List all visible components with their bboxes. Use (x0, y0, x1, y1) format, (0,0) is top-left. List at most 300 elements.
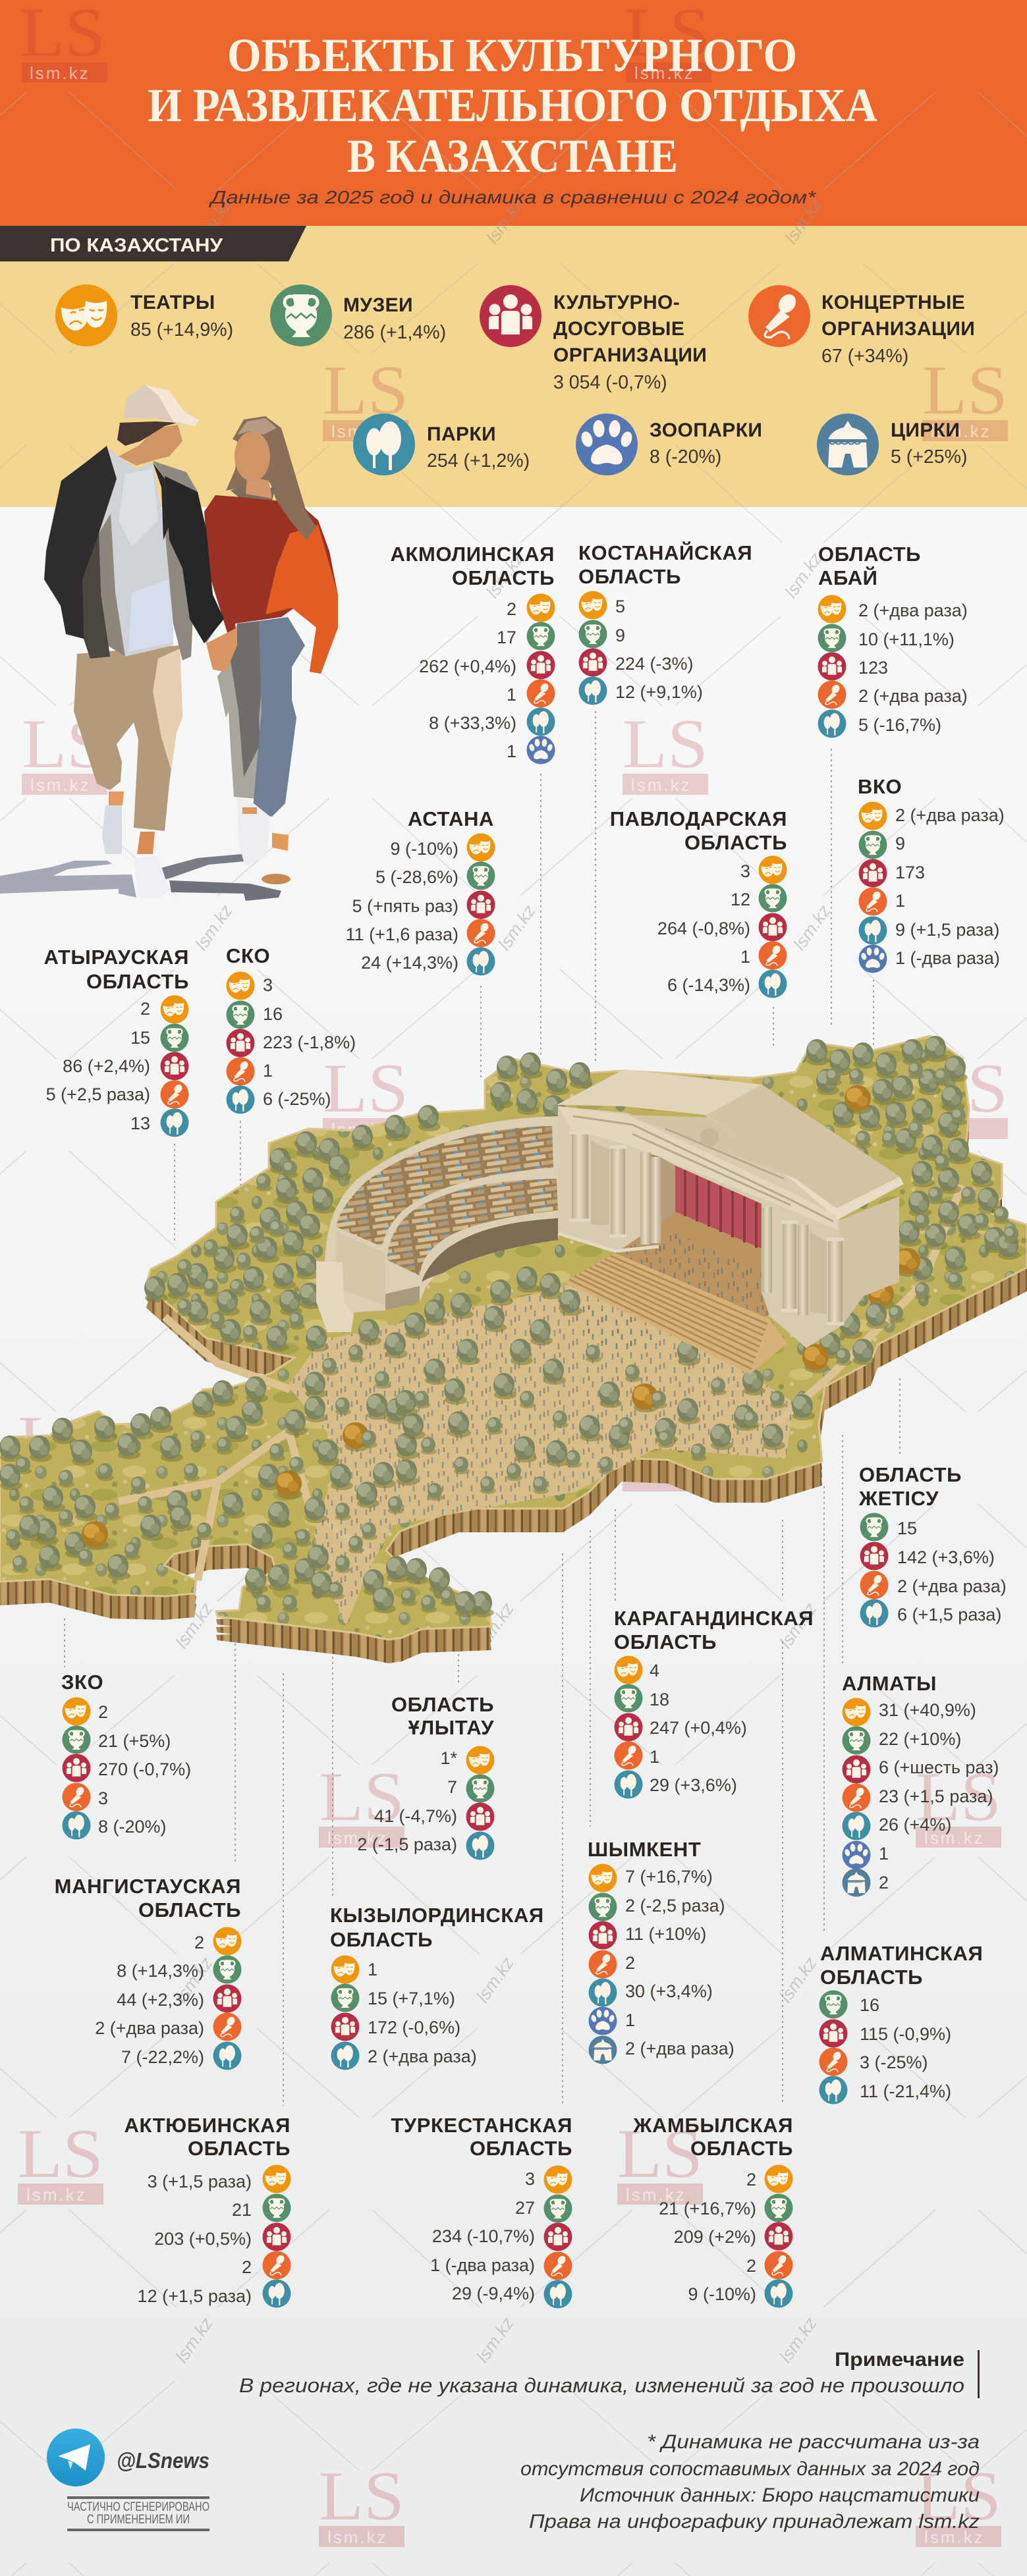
heading: ОБЛАСТЬ (138, 1898, 241, 1921)
watermark logos: LS (916, 2457, 1001, 2535)
small rotated watermarks (171, 194, 835, 2366)
stats: 8 (+14,3%) (117, 1961, 204, 1981)
stats: 26 (+4%) (879, 1815, 951, 1835)
heading: ЖЕТІСУ (858, 1487, 939, 1510)
stats (843, 1698, 999, 1896)
stats: 8 (-20%) (98, 1817, 167, 1837)
AI disclaimer: С ПРИМЕНЕНИЕМ ИИ (87, 2513, 190, 2527)
heading (330, 1904, 544, 1951)
stats: 2 (98, 1702, 108, 1722)
stats: 247 (+0,4%) (650, 1718, 747, 1738)
stats: 6 (-14,3%) (667, 975, 750, 995)
region: ВКО (858, 775, 1005, 973)
stats: 5 (615, 597, 625, 616)
stats: 9 (-10%) (688, 2284, 756, 2304)
small rotated watermarks: lsm.kz (171, 2313, 217, 2366)
stats: 1 (-два раза) (895, 948, 1000, 968)
stats: 2 (-1,5 раза) (357, 1835, 457, 1854)
stats: 173 (895, 863, 925, 882)
stats (346, 834, 495, 975)
roof (557, 1069, 900, 1212)
stats: 2 (879, 1873, 889, 1892)
stats: 41 (-4,7%) (374, 1806, 457, 1826)
stat: concert organisations (748, 285, 975, 367)
watermark logos: lsm.kz (626, 2185, 686, 2205)
heading: АЛМАТИНСКАЯ (820, 1942, 983, 1965)
woman (204, 416, 338, 884)
stats: 1 (507, 685, 516, 705)
stats: 1 (507, 741, 516, 761)
heading (391, 1693, 494, 1739)
heading (578, 541, 752, 588)
steps (564, 1253, 787, 1374)
stats (657, 856, 787, 998)
header band (0, 0, 1027, 226)
stats: 16 (860, 1995, 879, 2015)
stats: 44 (+2,3%) (117, 1990, 204, 2010)
small rotated watermarks: lsm.kz (472, 1599, 518, 1651)
stat: museums: МУЗЕИ (343, 294, 413, 316)
heading (818, 543, 921, 589)
heading: АКМОЛИНСКАЯ (391, 543, 555, 566)
watermark logos: lsm.kz (924, 2527, 985, 2547)
footnotes and source: отсутствия сопоставимых данных за 2024 год (520, 2458, 980, 2480)
region: Область Ұлытау (357, 1693, 494, 1860)
heading: ШЫМКЕНТ (588, 1838, 701, 1861)
watermark logos: lsm.kz (30, 775, 91, 795)
AI disclaimer: ЧАСТИЧНО СГЕНЕРИРОВАНО (67, 2500, 209, 2514)
stats: 2 (-2,5 раза) (625, 1896, 725, 1916)
stats: 2 (+два раза) (858, 686, 968, 706)
stat: cultural organisations: ОРГАНИЗАЦИИ (553, 344, 707, 366)
heading (610, 807, 787, 854)
watermark logos: LS (319, 1758, 404, 1835)
stats: 13 (130, 1114, 150, 1133)
stats (419, 594, 555, 764)
stat: parks: ПАРКИ (427, 423, 496, 445)
stats: 123 (858, 658, 888, 678)
stats (138, 2165, 291, 2307)
heading: ОБЛАСТЬ (452, 566, 555, 589)
section tab: По Казахстану: ПО КАЗАХСТАНУ (50, 235, 223, 256)
stats: 2 (746, 2256, 756, 2276)
stat: concert organisations: КОНЦЕРТНЫЕ (821, 292, 965, 313)
stat: circuses (817, 414, 967, 475)
small rotated watermarks: lsm.kz (482, 194, 528, 247)
heading: ОБЛАСТЬ (86, 970, 189, 993)
stats (859, 802, 1005, 973)
footnotes and source: Права на инфографику принадлежат lsm.kz (529, 2511, 980, 2533)
stat: circuses: ЦИРКИ (891, 419, 960, 441)
stats: 1 (740, 947, 750, 967)
stats: 5 (+2,5 раза) (46, 1085, 150, 1104)
subtitle: Данные за 2025 год и динамика в сравнении с 2024 годом* (208, 187, 816, 207)
title (148, 29, 877, 182)
small rotated watermarks: lsm.kz (472, 2313, 518, 2366)
heading: ЗКО (61, 1671, 103, 1694)
watermark logos: LS (916, 1758, 1001, 1835)
stat: parks (353, 414, 530, 475)
note block: Примечание (835, 2349, 964, 2371)
stats: 11 (+10%) (625, 1924, 706, 1944)
region: ЗКО (61, 1671, 191, 1839)
stats: 16 (263, 1004, 283, 1024)
stats: 18 (650, 1690, 669, 1709)
stats: 1* (440, 1748, 457, 1768)
small rotated watermarks: lsm.kz (775, 2313, 821, 2366)
stats: 3 (263, 975, 273, 995)
stats: 4 (650, 1661, 659, 1680)
stats: 209 (+2%) (674, 2227, 756, 2247)
stats: 203 (+0,5%) (154, 2229, 252, 2249)
heading: ЖАМБЫЛСКАЯ (632, 2114, 793, 2137)
stats: 1 (650, 1747, 659, 1767)
stats: 22 (+10%) (879, 1729, 961, 1749)
watermark logos: lsm.kz (331, 421, 392, 441)
shadows (0, 854, 281, 901)
panel: national stats (55, 284, 975, 475)
region: Костанайская область (578, 541, 752, 705)
small rotated watermarks: lsm.kz (789, 901, 835, 953)
stats: 115 (-0,9%) (860, 2024, 951, 2044)
stats: 223 (-1,8%) (263, 1033, 356, 1052)
stats: 1 (895, 891, 905, 911)
stats (95, 1927, 241, 2070)
heading (614, 1607, 814, 1653)
small rotated watermarks: lsm.kz (775, 1599, 821, 1651)
stat: zoos: 8 (-20%) (650, 446, 721, 468)
stat: theatres (55, 284, 233, 346)
heading: ОБЛАСТЬ (684, 831, 787, 854)
region: Мангистауская область (55, 1875, 241, 2070)
footnotes and source: Источник данных: Бюро нацстатистики (580, 2484, 980, 2506)
heading: КАРАГАНДИНСКАЯ (614, 1607, 814, 1630)
watermark logos: lsm.kz (931, 421, 991, 441)
heading: ОБЛАСТЬ (859, 1463, 962, 1486)
stage (615, 1212, 769, 1320)
stat: concert organisations: ОРГАНИЗАЦИИ (821, 318, 975, 340)
stat: museums: 286 (+1,4%) (343, 322, 446, 343)
watermark logos: LS (623, 1402, 708, 1479)
note block (239, 2349, 980, 2398)
map surface (0, 1036, 1027, 1640)
watermark logos: LS (323, 1050, 408, 1127)
stats: 7 (-22,2%) (121, 2047, 204, 2067)
stats (227, 972, 356, 1114)
heading (632, 2114, 793, 2160)
stat: zoos: ЗООПАРКИ (650, 419, 762, 441)
watermark logos: lsm.kz (924, 1828, 985, 1848)
stats: 3 (98, 1788, 108, 1808)
heading (391, 543, 555, 589)
small rotated watermarks: lsm.kz (482, 549, 528, 601)
small rotated watermarks: lsm.kz (191, 901, 236, 953)
stats: 8 (+33,3%) (429, 713, 516, 733)
watermark logos: lsm.kz (327, 1828, 388, 1848)
watermark logos: LS (617, 2115, 703, 2192)
icon: telegram (47, 2428, 105, 2486)
watermark logos: LS (319, 2457, 404, 2535)
footnotes and source (520, 2431, 980, 2533)
stats: 7 (+16,7%) (625, 1867, 713, 1887)
stats: 224 (-3%) (615, 654, 694, 674)
stats: 3 (-25%) (860, 2053, 928, 2072)
illustration: couple walking (0, 385, 338, 901)
stat: parks: 254 (+1,2%) (427, 450, 530, 471)
stats (430, 2166, 572, 2308)
small rotated watermarks: lsm.kz (775, 1953, 821, 2006)
stats: 10 (+11,1%) (858, 630, 955, 649)
stats: 21 (+16,7%) (659, 2199, 756, 2218)
stats: 3 (525, 2169, 535, 2189)
region: Алматинская область (819, 1942, 983, 2104)
heading: ОБЛАСТЬ (818, 543, 921, 566)
watermark logos: LS (623, 705, 708, 782)
dotted leader lines (65, 711, 900, 2106)
stats: 262 (+0,4%) (419, 657, 516, 676)
heading: ТУРКЕСТАНСКАЯ (391, 2114, 572, 2137)
region: Кызылординская область (330, 1904, 544, 2070)
small rotated watermarks: lsm.kz (472, 1953, 518, 2006)
watermark logos: lsm.kz (30, 63, 90, 83)
watermark logos: LS (922, 1050, 1008, 1127)
region: Карагандинская область (614, 1607, 814, 1798)
stats (46, 996, 188, 1137)
stage curtain (675, 1166, 762, 1248)
stats: 15 (+7,1%) (368, 1989, 455, 2008)
stats: 29 (-9,4%) (452, 2284, 535, 2303)
pediment (627, 1115, 801, 1181)
heading: ОБЛАСТЬ (188, 2137, 291, 2160)
stats: 5 (-16,7%) (858, 715, 941, 735)
stats: 2 (+два раза) (625, 2039, 735, 2058)
stats: 9 (+1,5 раза) (895, 920, 999, 940)
title: ОБЪЕКТЫ КУЛЬТУРНОГО (227, 29, 797, 82)
stats: 21 (232, 2200, 252, 2220)
stat: zoos (576, 414, 762, 475)
stat: theatres: ТЕАТРЫ (130, 292, 215, 313)
trees (0, 1036, 1020, 1617)
heading (55, 1875, 241, 1921)
stats: 15 (897, 1518, 917, 1538)
stats: 17 (497, 628, 516, 647)
watermark logos: LS (922, 352, 1008, 429)
stats: 86 (+2,4%) (63, 1056, 150, 1076)
region: СКО (226, 944, 356, 1114)
stats: 5 (-28,6%) (375, 867, 458, 887)
stat: cultural organisations: 3 054 (-0,7%) (553, 372, 667, 393)
heading: ОБЛАСТЬ (578, 565, 681, 588)
stats: 5 (+пять раз) (352, 896, 458, 916)
stats: 142 (+3,6%) (897, 1547, 995, 1567)
stats: 29 (+3,6%) (650, 1775, 737, 1795)
stats: 3 (740, 861, 750, 881)
watermark logos: lsm.kz (631, 775, 692, 795)
region: Актюбинская область (124, 2114, 291, 2307)
stats: 12 (731, 890, 750, 909)
stats: 11 (+1,6 раза) (346, 925, 458, 944)
man (44, 385, 237, 899)
heading: ОБЛАСТЬ (614, 1630, 717, 1653)
watermark logos: lsm.kz (331, 1119, 392, 1139)
watermark logos: LS (323, 352, 408, 429)
watermark logos: lsm.kz (634, 63, 695, 83)
stats: 172 (-0,6%) (368, 2018, 460, 2037)
national summary band (0, 226, 1027, 507)
heading: СКО (226, 944, 270, 967)
stats (860, 1513, 1007, 1627)
stats: 3 (+1,5 раза) (148, 2172, 252, 2191)
stats: 1 (625, 2010, 635, 2030)
heading: ВКО (858, 775, 902, 798)
small rotated watermarks: lsm.kz (494, 901, 540, 953)
stats (357, 1746, 494, 1860)
heading: МАНГИСТАУСКАЯ (55, 1875, 241, 1898)
stats: 1 (879, 1844, 889, 1864)
stats: 2 (140, 999, 150, 1019)
stat: cultural organisations (480, 285, 707, 393)
stats (331, 1956, 477, 2070)
heading (391, 2114, 572, 2160)
stats: 27 (515, 2198, 535, 2218)
small rotated watermarks: lsm.kz (171, 1953, 217, 2006)
stats: 11 (-21,4%) (860, 2081, 951, 2101)
stats: 30 (+3,4%) (625, 1981, 713, 2001)
note block: В регионах, где не указана динамика, изменений за год не произошло (239, 2374, 964, 2397)
stats: 2 (+два раза) (895, 805, 1005, 825)
stats (579, 591, 703, 705)
heading: АТЫРАУСКАЯ (43, 946, 189, 969)
stats (615, 1656, 747, 1798)
stats: 6 (+шесть раз) (879, 1758, 999, 1777)
region: Алматы (842, 1672, 999, 1896)
stats (659, 2165, 792, 2307)
stats: 6 (-25%) (263, 1089, 331, 1109)
region: Астана (346, 807, 495, 975)
stats: 9 (-10%) (390, 839, 458, 859)
heading: ОБЛАСТЬ (470, 2137, 572, 2160)
stats (63, 1698, 191, 1839)
heading (124, 2114, 291, 2160)
stats: 23 (+1,5 раза) (879, 1786, 993, 1806)
small rotated watermarks: lsm.kz (191, 194, 236, 247)
heading: ПАВЛОДАРСКАЯ (610, 807, 787, 830)
stats: 9 (615, 626, 625, 645)
heading: АБАЙ (818, 566, 878, 589)
stats: 2 (+два раза) (897, 1576, 1007, 1596)
stats: 9 (895, 834, 905, 853)
watermark logos: lsm.kz (327, 2527, 388, 2547)
stats: 15 (130, 1028, 150, 1048)
heading (858, 1463, 962, 1510)
stat: circuses: 5 (+25%) (891, 446, 967, 468)
small rotated watermarks: lsm.kz (171, 1599, 217, 1651)
region: Туркестанская область (391, 2114, 572, 2308)
stats: 12 (+1,5 раза) (138, 2286, 252, 2306)
heading: КЫЗЫЛОРДИНСКАЯ (330, 1904, 544, 1927)
heading: ОБЛАСТЬ (690, 2137, 793, 2160)
heading: АЛМАТЫ (842, 1672, 937, 1695)
amphitheatre (316, 1116, 559, 1332)
region: Область Жетісу (858, 1463, 1007, 1627)
stats: 21 (+5%) (98, 1731, 171, 1751)
stat: cultural organisations: КУЛЬТУРНО- (553, 292, 680, 313)
title: И РАЗВЛЕКАТЕЛЬНОГО ОТДЫХА (148, 79, 877, 132)
watermark logos: lsm.kz (26, 2185, 87, 2205)
map cliff edge (0, 1044, 1027, 1663)
stats (818, 595, 968, 738)
stats: 7 (447, 1777, 457, 1797)
telegram badge: @LSnews (117, 2448, 209, 2473)
watermark logos: LS (18, 1402, 103, 1479)
stats: 24 (+14,3%) (361, 953, 458, 973)
telegram badge (47, 2428, 209, 2486)
region: Акмолинская область (391, 543, 555, 764)
AI disclaimer (67, 2496, 209, 2531)
heading: ҰЛЫТАУ (408, 1716, 494, 1739)
stats: 2 (507, 599, 516, 619)
region: Атырауская область (43, 946, 189, 1137)
stats (589, 1864, 735, 2064)
stats: 1 (368, 1960, 377, 1979)
stats (819, 1991, 951, 2104)
stats: 270 (-0,7%) (98, 1759, 191, 1779)
stats: 6 (+1,5 раза) (897, 1605, 1001, 1624)
section tab: По Казахстану (0, 226, 306, 261)
sand plaza (119, 1185, 962, 1626)
stats: 2 (+два раза) (368, 2047, 477, 2066)
stats: 234 (-10,7%) (432, 2226, 535, 2246)
stat: concert organisations: 67 (+34%) (821, 346, 908, 367)
stat: theatres: 85 (+14,9%) (130, 319, 233, 340)
theatre building (557, 1069, 904, 1374)
heading: АКТЮБИНСКАЯ (124, 2114, 291, 2137)
region: Жамбылская область (632, 2114, 793, 2307)
heading: КОСТАНАЙСКАЯ (578, 541, 752, 564)
watermark logos: LS (22, 705, 107, 782)
stats: 31 (+40,9%) (879, 1700, 976, 1720)
stat: cultural organisations: ДОСУГОВЫЕ (553, 318, 684, 340)
small rotated watermarks: lsm.kz (781, 194, 826, 247)
heading: ОБЛАСТЬ (391, 1693, 494, 1716)
stats: 264 (-0,8%) (657, 919, 750, 938)
columns (572, 1133, 843, 1324)
stats: 2 (625, 1953, 635, 1973)
heading (43, 946, 189, 993)
region: Шымкент (588, 1838, 735, 2064)
heading: АСТАНА (408, 807, 494, 830)
stats: 12 (+9,1%) (615, 682, 703, 702)
stats: 2 (746, 2170, 756, 2189)
stats: 2 (242, 2257, 252, 2277)
stats: 1 (-два раза) (430, 2255, 535, 2275)
map of Kazakhstan (0, 1036, 1027, 1663)
region: Павлодарская область (610, 807, 787, 998)
stat: museums (270, 284, 446, 346)
stats: 1 (263, 1061, 273, 1081)
stats: 2 (194, 1933, 204, 1952)
stats: 2 (+два раза) (95, 2018, 204, 2038)
region: Область Абай (818, 543, 968, 738)
stats: 2 (+два раза) (858, 601, 968, 620)
heading (820, 1942, 983, 1989)
footnotes and source: * Динамика не рассчитана из-за (647, 2431, 980, 2453)
heading: ОБЛАСТЬ (330, 1928, 433, 1951)
title: В КАЗАХСТАНЕ (347, 130, 678, 182)
heading: ОБЛАСТЬ (820, 1966, 923, 1989)
small rotated watermarks: lsm.kz (781, 549, 826, 601)
watermark logos: LS (18, 2115, 103, 2192)
